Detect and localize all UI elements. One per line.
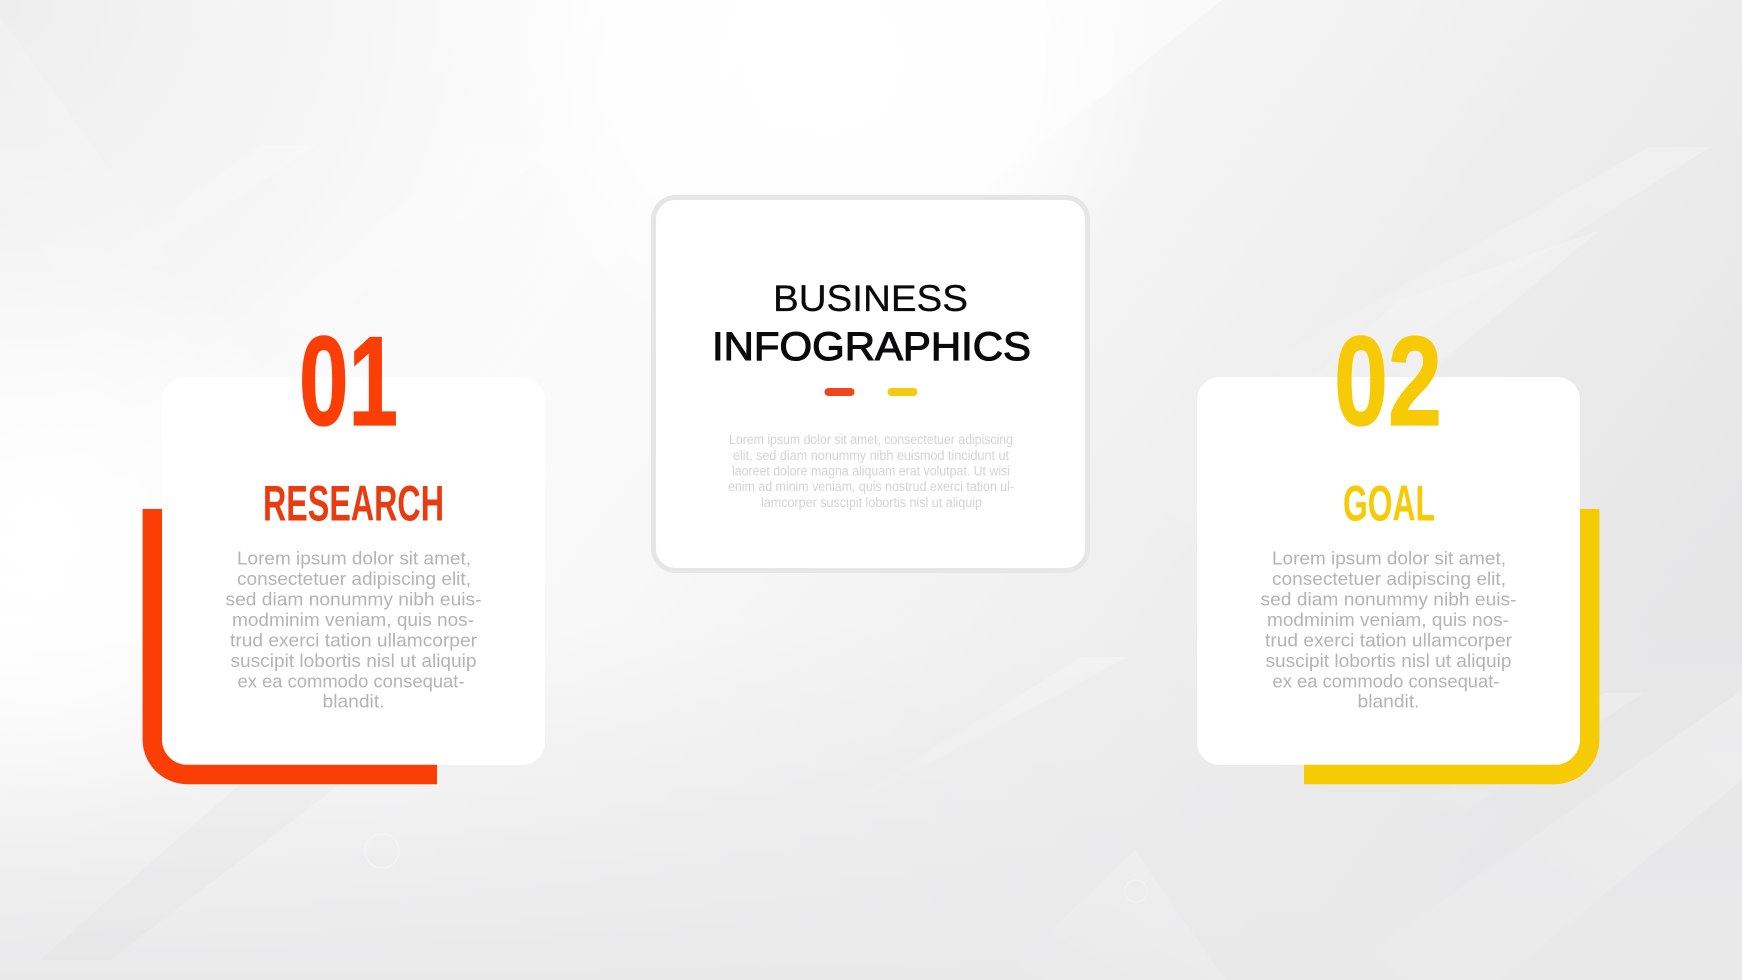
number 02: 02 — [1334, 310, 1442, 452]
heading: research: RESEARCH — [263, 476, 444, 532]
body text: Lorem ipsum dolor sit amet, — [1272, 548, 1506, 568]
title: infographics: INFOGRAPHICS — [712, 325, 1031, 369]
panel: title card — [654, 198, 1088, 570]
body text: modminim veniam, quis nos- — [232, 609, 474, 630]
accent bracket: yellow — [1304, 509, 1590, 774]
description text: Lorem ipsum dolor sit amet, consectetuer adipiscing — [729, 432, 1013, 447]
panel: goal card — [1197, 310, 1590, 774]
description text: lamcorper suscipit lobortis nisl ut aliquip — [761, 495, 982, 510]
divider dash: red — [824, 388, 854, 396]
divider dash: yellow — [888, 388, 918, 396]
accent bracket: red — [152, 509, 437, 774]
body text: modminim veniam, quis nos- — [1267, 609, 1509, 630]
body text: blandit. — [322, 690, 384, 712]
body text: sed diam nonummy nibh euis- — [1260, 588, 1516, 610]
card background — [1197, 377, 1580, 765]
body text: blandit. — [1358, 690, 1420, 712]
body text — [226, 548, 482, 712]
card background — [162, 377, 545, 765]
heading: goal: GOAL — [1343, 476, 1435, 532]
panel: research card — [152, 310, 545, 774]
description text: enim ad minim veniam, quis nostrud exerci tation ul- — [728, 479, 1014, 494]
body text: ex ea commodo consequat- — [238, 670, 464, 692]
description text — [728, 432, 1014, 510]
number 01: 01 — [299, 310, 398, 452]
body text: sed diam nonummy nibh euis- — [226, 588, 482, 610]
body text: trud exerci tation ullamcorper — [230, 630, 477, 650]
body text: consectetuer adipiscing elit, — [1272, 568, 1506, 589]
body text: Lorem ipsum dolor sit amet, — [237, 548, 471, 568]
body text: consectetuer adipiscing elit, — [237, 568, 471, 589]
body text: ex ea commodo consequat- — [1272, 670, 1500, 692]
body text — [1260, 548, 1516, 712]
card background — [654, 198, 1088, 570]
body text: trud exerci tation ullamcorper — [1265, 630, 1512, 650]
description text: elit, sed diam nonummy nibh euismod tincidunt ut — [733, 448, 1009, 463]
body text: suscipit lobortis nisl ut aliquip — [230, 650, 476, 671]
body text: suscipit lobortis nisl ut aliquip — [1266, 650, 1512, 671]
description text: laoreet dolore magna aliquam erat volutpat. Ut wisi — [732, 464, 1010, 478]
title: business: BUSINESS — [773, 278, 968, 319]
